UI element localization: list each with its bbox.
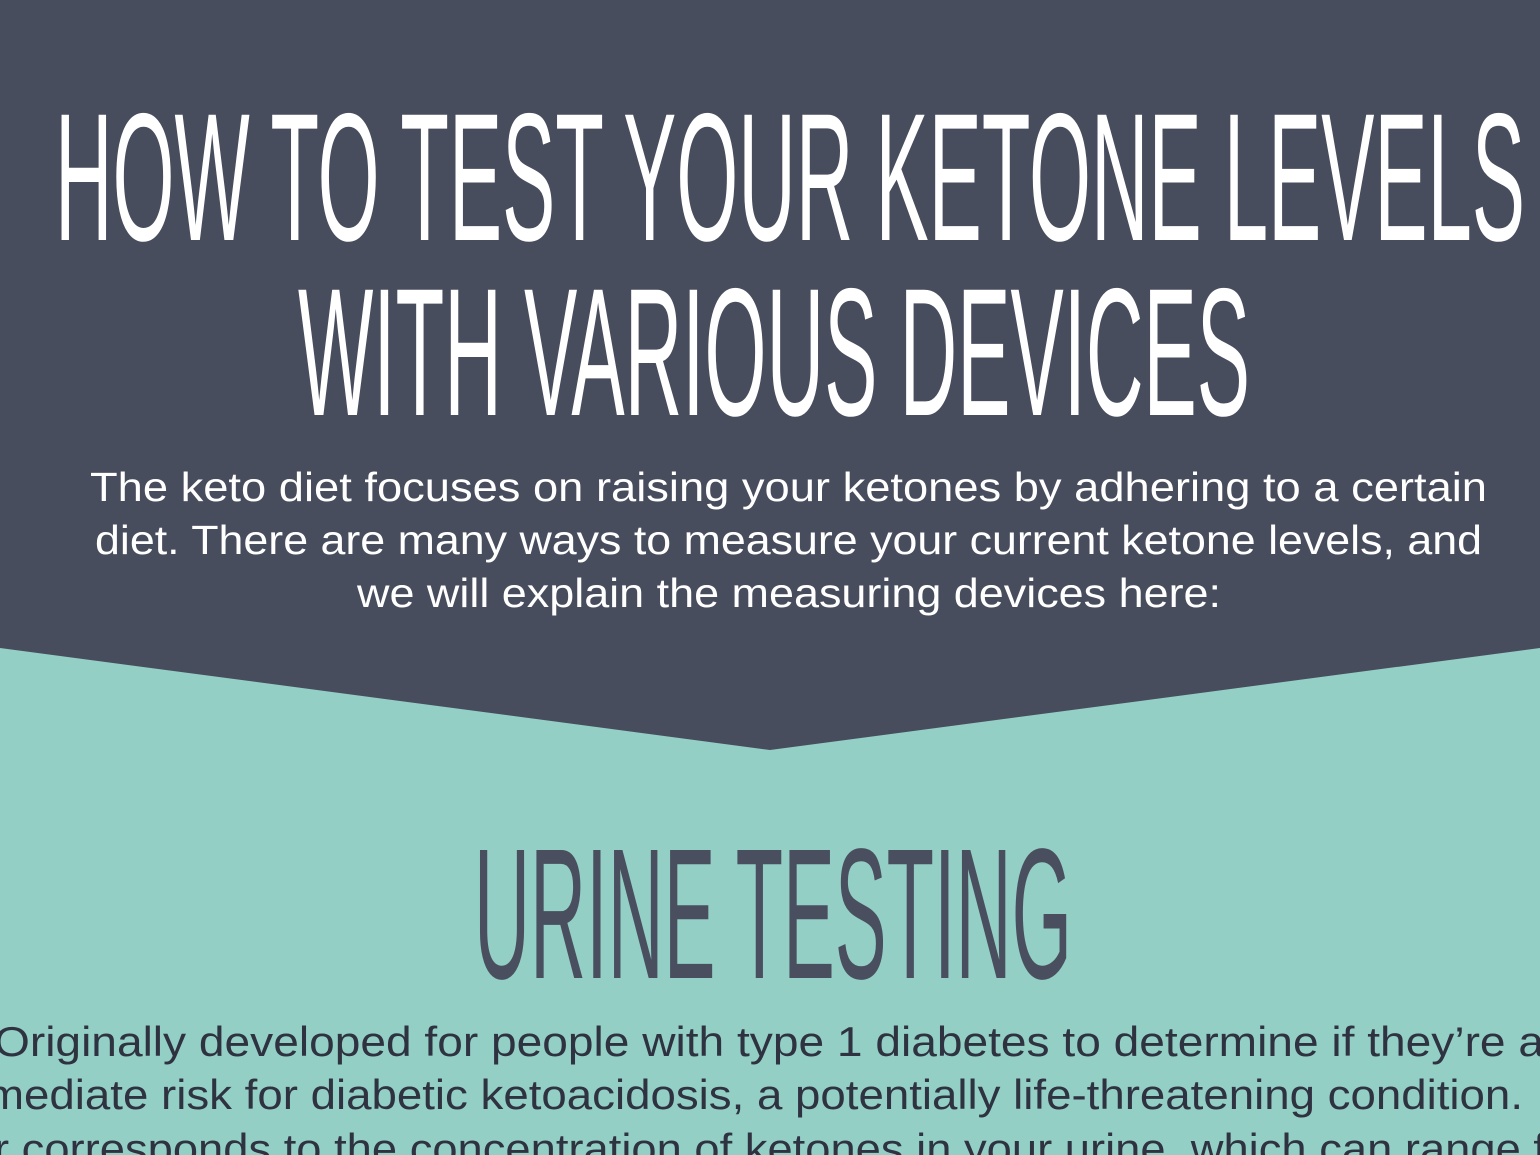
intro text: we will explain the measuring devices here:	[356, 570, 1221, 616]
header panel with chevron	[0, 0, 1540, 750]
title	[55, 75, 1525, 454]
urine testing description	[0, 1018, 1540, 1155]
intro text	[90, 464, 1487, 616]
urine testing description: mediate risk for diabetic ketoacidosis, a potentially life-threatening condition.	[0, 1071, 1523, 1118]
intro text: diet. There are many ways to measure your current ketone levels, and	[95, 517, 1482, 563]
urine testing description: Originally developed for people with type 1 diabetes to determine if they’re a	[0, 1018, 1540, 1065]
intro text: The keto diet focuses on raising your ketones by adhering to a certain	[90, 464, 1487, 510]
